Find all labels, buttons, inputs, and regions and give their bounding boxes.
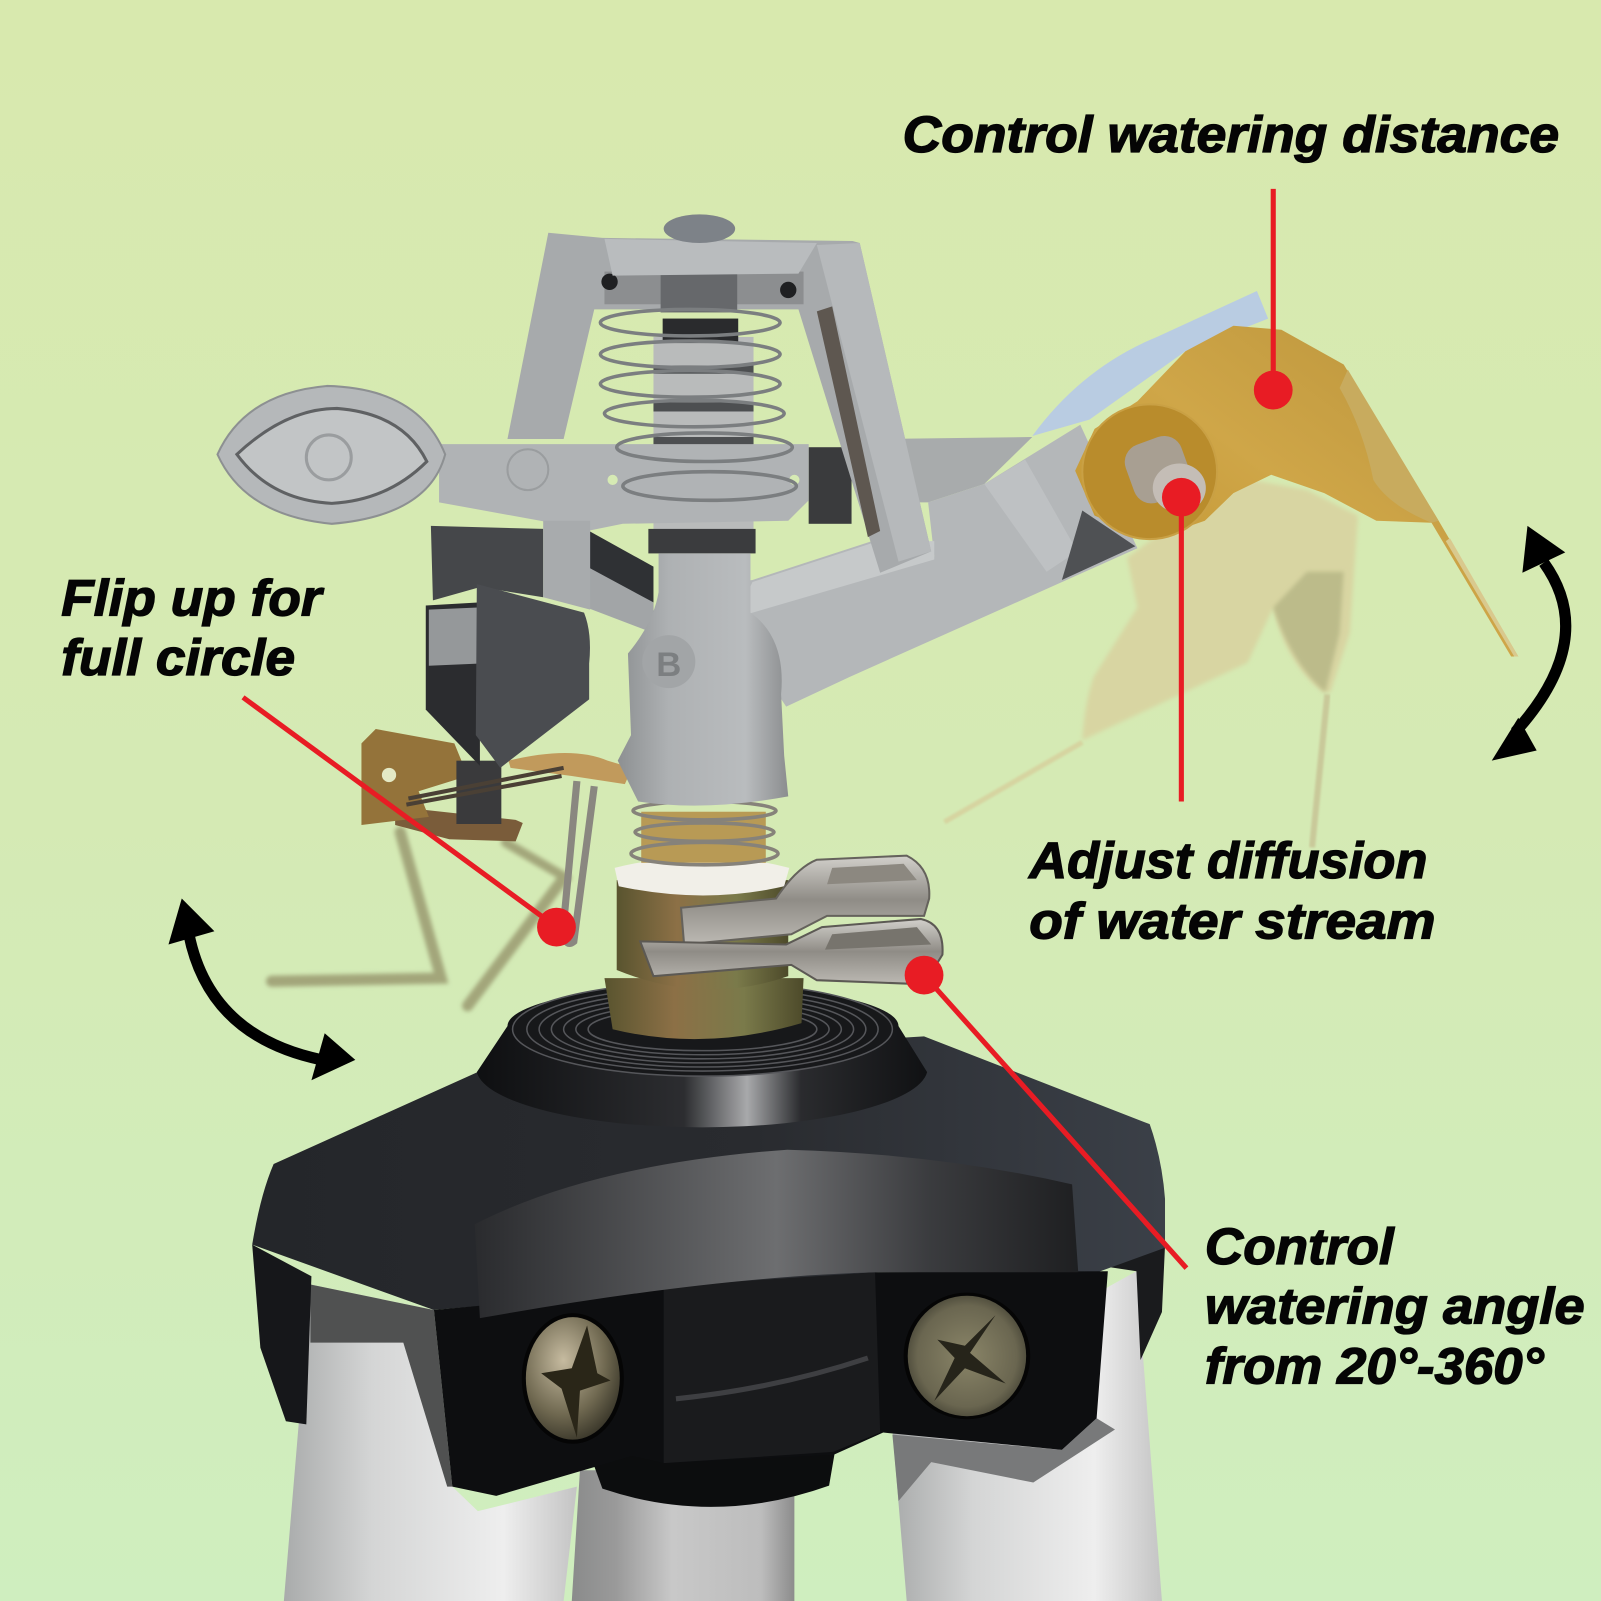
tripod legs: [284, 1271, 1162, 1601]
front curved band: [475, 1150, 1078, 1318]
latch plate: [508, 753, 632, 784]
upper stop clip: [681, 856, 929, 944]
callout: control angle: [905, 956, 1585, 1395]
sprinkler stem hardware: [604, 802, 943, 1039]
under-cap bar: [604, 272, 804, 304]
red leader: [905, 956, 1186, 1268]
brass deflector blade: [1075, 326, 1518, 657]
red leader: [243, 697, 576, 947]
axle: [456, 761, 501, 824]
right leg shade: [892, 1418, 1115, 1501]
left screw: [522, 1313, 624, 1444]
callout: flip up: Flip up for: [61, 570, 325, 627]
callout: flip up: [61, 570, 576, 947]
flip pin: [564, 781, 594, 943]
frame right face: [817, 243, 931, 562]
frame struts: [507, 233, 931, 573]
hex nut: [604, 978, 804, 1039]
right screw: [904, 1293, 1030, 1419]
blade fold: [1340, 370, 1439, 523]
wire loop: [406, 768, 564, 805]
washer: [1082, 404, 1217, 539]
red leader: [1162, 478, 1201, 802]
arm facet: [984, 459, 1077, 572]
threaded collar: [617, 880, 788, 990]
brass bracket: [361, 729, 468, 825]
callout: control watering distance: Control watering distance: [903, 106, 1559, 163]
spoon arm and eye paddle: [217, 386, 809, 531]
flip-up block side: [426, 602, 480, 766]
motion ghost of flip lever: [272, 832, 567, 1006]
rivets: [601, 274, 796, 298]
sprinkler upper head: [217, 214, 1268, 806]
left skirt: [252, 1245, 311, 1424]
dark window: [809, 447, 852, 524]
right leg: [892, 1271, 1162, 1601]
red leader: [1254, 189, 1293, 409]
B boss: [642, 635, 695, 688]
flip-up block side highlight: [429, 608, 478, 666]
right skirt: [1103, 1246, 1165, 1360]
B boss: B: [656, 646, 681, 684]
left leg: [284, 1284, 577, 1601]
lower brass spring: [631, 802, 778, 865]
bolt: [1120, 431, 1206, 513]
white washer: [615, 857, 789, 895]
motion ghost of deflector blade: [944, 480, 1358, 847]
arm dark patch: [1062, 511, 1135, 580]
collar: [590, 1450, 835, 1507]
frame cap: [604, 239, 817, 276]
frame slit: [817, 306, 880, 537]
back spoon arm: [878, 437, 1032, 502]
callout: control angle: watering angle: [1205, 1277, 1585, 1334]
socket highlight: [676, 1358, 868, 1399]
callout: control angle: Control: [1205, 1218, 1396, 1275]
top plate: [252, 1036, 1165, 1310]
brass tab and flip pin: [361, 729, 632, 943]
callout: control angle: from 20°-360°: [1205, 1338, 1544, 1395]
spoon arm holes: [608, 475, 799, 485]
central socket: [664, 1272, 880, 1463]
callout: adjust diffusion: of water stream: [1029, 892, 1436, 949]
concentric rings: [513, 982, 892, 1076]
flip-up block: [476, 584, 590, 768]
blade plate: [1075, 326, 1518, 657]
gray strut: [589, 568, 653, 633]
black double arrow: left: [168, 899, 355, 1080]
lower plate: [395, 807, 523, 841]
gasket: [648, 529, 756, 553]
callout: adjust diffusion: [1027, 478, 1436, 949]
main body: [618, 553, 788, 806]
under-cap cylinder: [661, 272, 737, 312]
black tripod head: [252, 1036, 1165, 1507]
shaft: [653, 337, 754, 531]
blade tip pale edge: [1446, 538, 1518, 657]
arm highlight: [1032, 291, 1268, 436]
lower stop clip: [640, 919, 943, 984]
main arm: [722, 425, 1137, 707]
center leg: [572, 1470, 794, 1601]
black double arrow: right: [1492, 526, 1566, 761]
callout: flip up: full circle: [61, 629, 295, 686]
ribbed base cone: [477, 982, 927, 1127]
callout: control watering distance: [903, 106, 1559, 409]
callout: adjust diffusion: Adjust diffusion: [1027, 832, 1427, 889]
coil spring: [600, 309, 796, 500]
top rivet: [664, 214, 735, 243]
left leg upper shade: [310, 1284, 452, 1487]
lower block: [434, 1271, 1108, 1496]
dark bracket behind: [431, 526, 543, 600]
stem below paddle: [543, 521, 590, 610]
